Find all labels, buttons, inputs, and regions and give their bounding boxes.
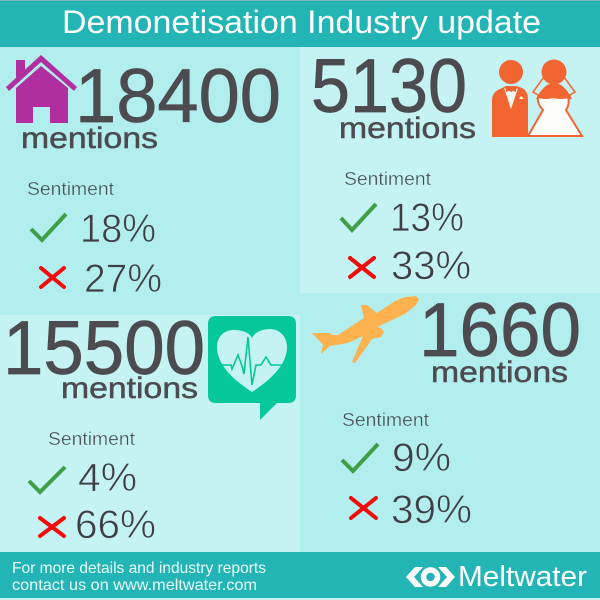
footer contact text: contact us on www.meltwater.com [12, 577, 257, 594]
Meltwater wordmark: Meltwater [458, 561, 587, 593]
weddings positive: 13% [390, 196, 464, 240]
icon: heart speech bubble [208, 316, 296, 420]
icon: couple [492, 60, 582, 137]
weddings figure: 5130 [311, 44, 467, 129]
healthcare figure: 15500 [3, 306, 205, 391]
healthcare positive: 4% [78, 456, 137, 500]
aviation positive: 9% [392, 436, 451, 480]
header bar [0, 0, 600, 47]
healthcare mentions: mentions [61, 372, 198, 405]
weddings negative: 33% [391, 244, 471, 288]
aviation mentions: mentions [431, 356, 568, 389]
aviation sentiment label: Sentiment [342, 410, 429, 430]
footer contact text: For more details and industry reports [12, 560, 266, 577]
icon: Meltwater logo [406, 567, 455, 587]
icon: house [6, 55, 77, 123]
icon: check [29, 467, 65, 492]
panel: weddings [300, 44, 600, 293]
weddings sentiment label: Sentiment [344, 169, 431, 189]
icon: check [341, 204, 376, 230]
aviation figure: 1660 [419, 288, 581, 373]
panel: aviation [300, 288, 600, 552]
footer bar [0, 552, 600, 598]
icon: check [31, 214, 66, 240]
housing negative: 27% [84, 257, 162, 301]
housing positive: 18% [80, 207, 156, 251]
panel: healthcare [0, 306, 300, 552]
icon: cross [351, 498, 376, 518]
housing figure: 18400 [75, 54, 281, 139]
housing mentions: mentions [21, 122, 158, 155]
footer contact text [12, 560, 266, 594]
icon: cross [41, 268, 64, 287]
icon: cross [350, 258, 374, 277]
icon: check [342, 444, 378, 471]
title: Demonetisation Industry update [62, 4, 541, 40]
aviation negative: 39% [391, 488, 472, 532]
healthcare sentiment label: Sentiment [48, 429, 135, 449]
icon: airplane [312, 296, 419, 363]
healthcare negative: 66% [75, 503, 156, 547]
housing sentiment label: Sentiment [27, 179, 114, 199]
weddings mentions: mentions [339, 112, 476, 145]
icon: cross [40, 518, 64, 536]
panel: housing [0, 47, 300, 315]
